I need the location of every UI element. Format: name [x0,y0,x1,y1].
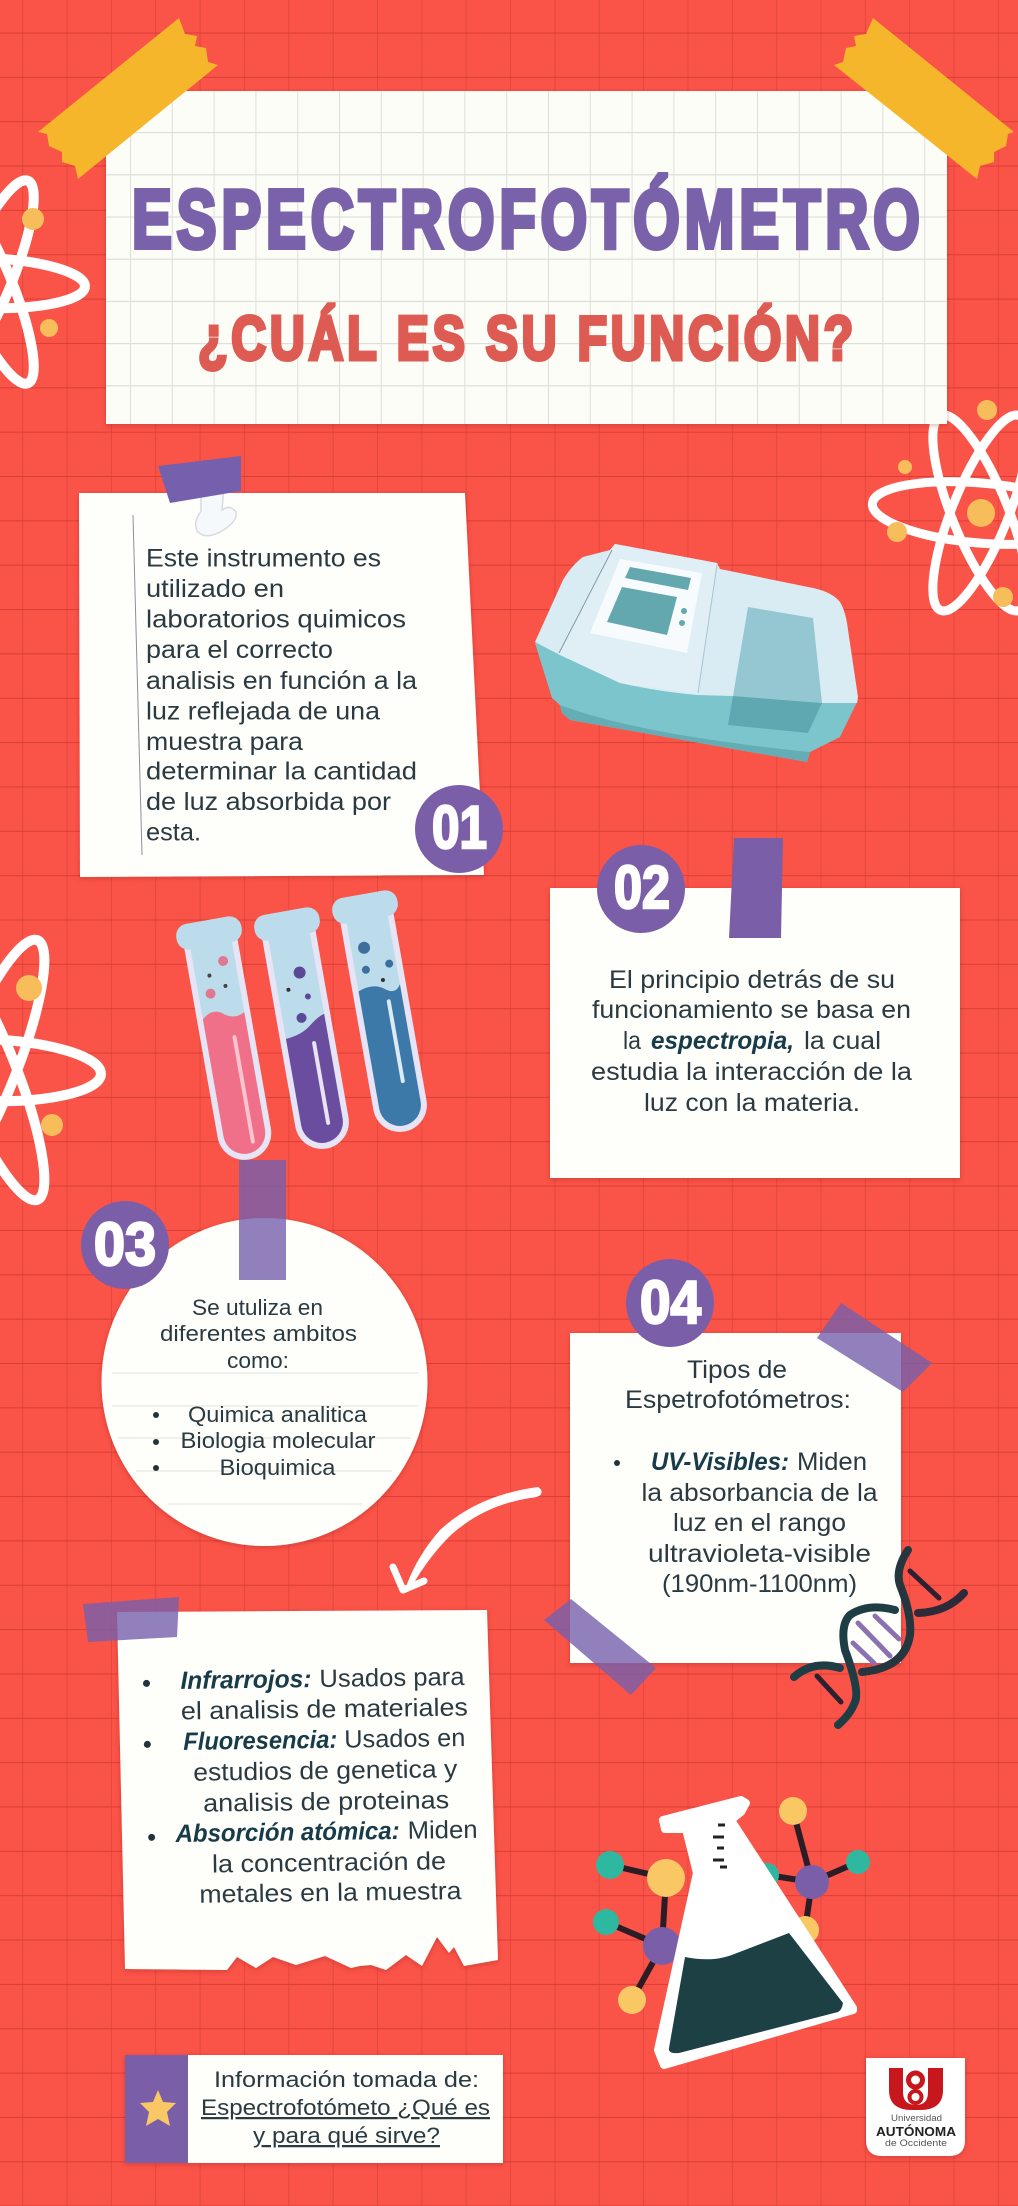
text block: source: Espectrofotómeto ¿Qué es [201,2095,490,2120]
text block: note 05: Usados en [344,1724,465,1754]
badge: 01: 01 [432,794,487,861]
text block: note 04 [614,1356,878,1598]
badge: 02: 02 [614,854,670,921]
tape: yellow right [834,18,1014,179]
text block: note 03: Quimica analitica [188,1402,368,1427]
text block: note 04: UV-Visibles: [651,1448,789,1476]
text block: note 02 [591,966,912,1117]
text block: note 04: Tipos de [687,1356,787,1384]
icon: molecule and flask [593,1797,870,2065]
text block: note 01: luz reflejada de una [146,697,380,725]
text block: note 01: esta. [146,818,201,846]
text block: note 02: luz con la materia. [644,1089,860,1117]
tape: purple note 04 bottom [544,1599,656,1695]
tape: yellow left [38,18,218,179]
text block: note 03: Se utuliza en [192,1295,323,1320]
text block: note 02: funcionamiento se basa en [592,996,911,1024]
badge: 04: 04 [640,1269,702,1336]
badge: 02 [597,845,685,933]
text block: note 02: la [623,1027,641,1055]
text block: note 03: diferentes ambitos [160,1321,357,1346]
text block: note 02: estudia la interacción de la [591,1058,912,1086]
text block: note 04: Espetrofotómetros: [625,1386,851,1414]
text block: note 04: ultravioleta-visible [648,1540,871,1568]
text block: note 04: luz en el rango [673,1509,846,1537]
logo: university [866,2058,965,2156]
text block: note 05: analisis de proteinas [203,1786,449,1818]
tape: purple note 05 [83,1597,179,1642]
text block: source: Información tomada de: [214,2067,479,2092]
panel: circle note 03 [102,1218,428,1546]
text block: source: y para qué sirve? [253,2123,440,2148]
badge: 03 [81,1201,169,1289]
logo: university: Universidad [891,2113,942,2123]
text block: source [201,2067,490,2148]
panel: note 04 [570,1333,901,1663]
text block: note 01: Este instrumento es [146,545,381,573]
text block: note 02: espectropia, [651,1027,794,1055]
icon: atom middle left [0,929,102,1211]
text block: note 04: (190nm-1100nm) [662,1570,857,1598]
arrow: curved white [393,1487,542,1590]
text block: note 05: estudios de genetica y [193,1755,458,1787]
text block: note 01: utilizado en [146,575,284,603]
icon: atom top left [0,171,86,393]
icon: atom top right [870,400,1018,621]
tape: purple note 03 [239,1160,286,1280]
text block: note 03: Biologia molecular [180,1428,376,1453]
heading: main title: ESPECTROFOTÓMETRO [132,173,920,266]
text block: note 05: metales en la muestra [199,1877,462,1909]
panel: torn note 05 [117,1610,498,1970]
icon: purple tube [252,905,359,1154]
text block: note 05: la concentración de [212,1847,446,1879]
icon: test tubes [174,888,437,1165]
badge: 01 [415,785,503,873]
logo: university: de Occidente [885,2138,947,2148]
text block: note 03: Bioquimica [220,1455,336,1480]
icon: DNA helix [794,1550,964,1725]
tape: purple note 02 [729,838,783,938]
text block: note 05: Miden [407,1816,478,1845]
text block: note 04: Miden [797,1448,867,1476]
icon: paper clip [196,485,236,536]
text block: note 05: el analisis de materiales [181,1693,468,1725]
text block: note 01: muestra para [146,728,303,756]
icon: pink tube [174,914,281,1165]
text block: note 03 [153,1295,376,1480]
logo: university: AUTÓNOMA [876,2124,957,2139]
text block: note 02: la cual [804,1027,881,1055]
badge: 03: 03 [94,1211,156,1278]
text block: note 01: determinar la cantidad [146,758,417,786]
panel: note 01 [79,456,484,877]
text block: note 05: Usados para [319,1663,465,1693]
text block: note 01: analisis en función a la [146,667,417,695]
panel: title card [106,91,947,424]
text block: note 05: Fluoresencia: [183,1726,337,1756]
icon: blue tube [330,888,437,1137]
text block: note 05 [143,1663,479,1909]
icon: flask [658,1800,853,2065]
text block: note 01: para el correcto [146,636,333,664]
text block: note 02: El principio detrás de su [609,966,895,994]
heading: subtitle: ¿CUÁL ES SU FUNCIÓN? [198,304,853,373]
text block: note 05: Infrarrojos: [180,1665,312,1695]
tape: purple note 04 top [817,1303,932,1392]
icon: star [140,2090,176,2126]
badge: 04 [626,1259,714,1347]
text block: note 01: de luz absorbida por [146,788,391,816]
text block: note 05: Absorción atómica: [174,1817,400,1848]
text block: note 03: como: [227,1348,289,1373]
text block: note 01 [146,545,417,846]
text block: note 04: la absorbancia de la [642,1479,878,1507]
text block: note 01: laboratorios quimicos [146,606,406,634]
panel: source footer [125,2055,503,2163]
icon: spectrophotometer [535,544,858,762]
icon: molecule [593,1797,870,2014]
tape: purple note 01 [158,456,241,503]
panel: note 02 [550,888,960,1178]
